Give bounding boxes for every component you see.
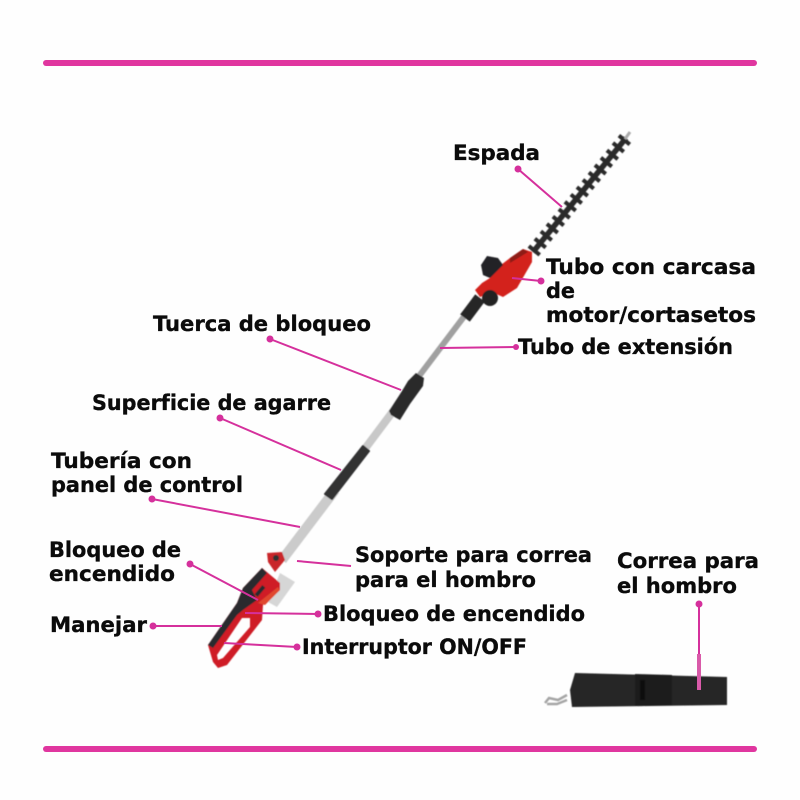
callout: Bloqueo de encendido left: Bloqueo de <box>49 538 181 562</box>
callout: Bloqueo de encendido left: encendido <box>49 562 175 586</box>
bottom bar <box>43 746 757 752</box>
callout: Manejar <box>50 613 222 637</box>
top bar <box>43 60 757 66</box>
callout: Tubo de extensión: Tubo de extensión <box>518 335 733 359</box>
callout: Superficie de agarre <box>92 391 341 470</box>
callout: Correa para el hombro: Correa para <box>617 549 759 573</box>
callout: Soporte para correa: para el hombro <box>355 568 536 592</box>
shoulder strap <box>545 673 727 707</box>
callout: Tubo con carcasa <box>512 255 756 327</box>
cutting blade <box>533 132 630 252</box>
hedge trimmer product image <box>208 132 727 707</box>
grip <box>325 446 369 499</box>
callout: Correa para el hombro <box>617 549 759 690</box>
callout: Bloqueo de encendido right: Bloqueo de encendido <box>323 602 585 626</box>
callout: Soporte para correa: Soporte para correa <box>355 543 592 567</box>
callout: Bloqueo de encendido left <box>49 538 258 600</box>
callout: Tubería con panel de control: panel de control <box>51 473 243 497</box>
callout: Tuerca de bloqueo <box>153 312 401 390</box>
telescopic pole <box>282 314 466 560</box>
callout: Tuerca de bloqueo: Tuerca de bloqueo <box>153 312 371 336</box>
callout: Tubería con panel de control: Tubería con <box>51 449 192 473</box>
callout: Tubo con carcasa: Tubo con carcasa <box>546 255 756 279</box>
callout: Tubo con carcasa: motor/cortasetos <box>546 303 756 327</box>
callout: Soporte para correa <box>297 543 592 592</box>
locking nut <box>389 373 424 420</box>
callout: Tubo con carcasa: de <box>546 279 575 303</box>
callout: Interruptor ON/OFF: Interruptor ON/OFF <box>302 635 527 659</box>
callout: Espada <box>453 141 562 207</box>
callout: Espada: Espada <box>453 141 540 165</box>
motor housing <box>465 249 532 318</box>
callout: Tubería con panel de control <box>51 449 300 527</box>
callout: Correa para el hombro: el hombro <box>617 574 737 598</box>
handle <box>208 552 295 668</box>
callout: Manejar: Manejar <box>50 613 148 637</box>
callout: Superficie de agarre: Superficie de agarre <box>92 391 331 415</box>
